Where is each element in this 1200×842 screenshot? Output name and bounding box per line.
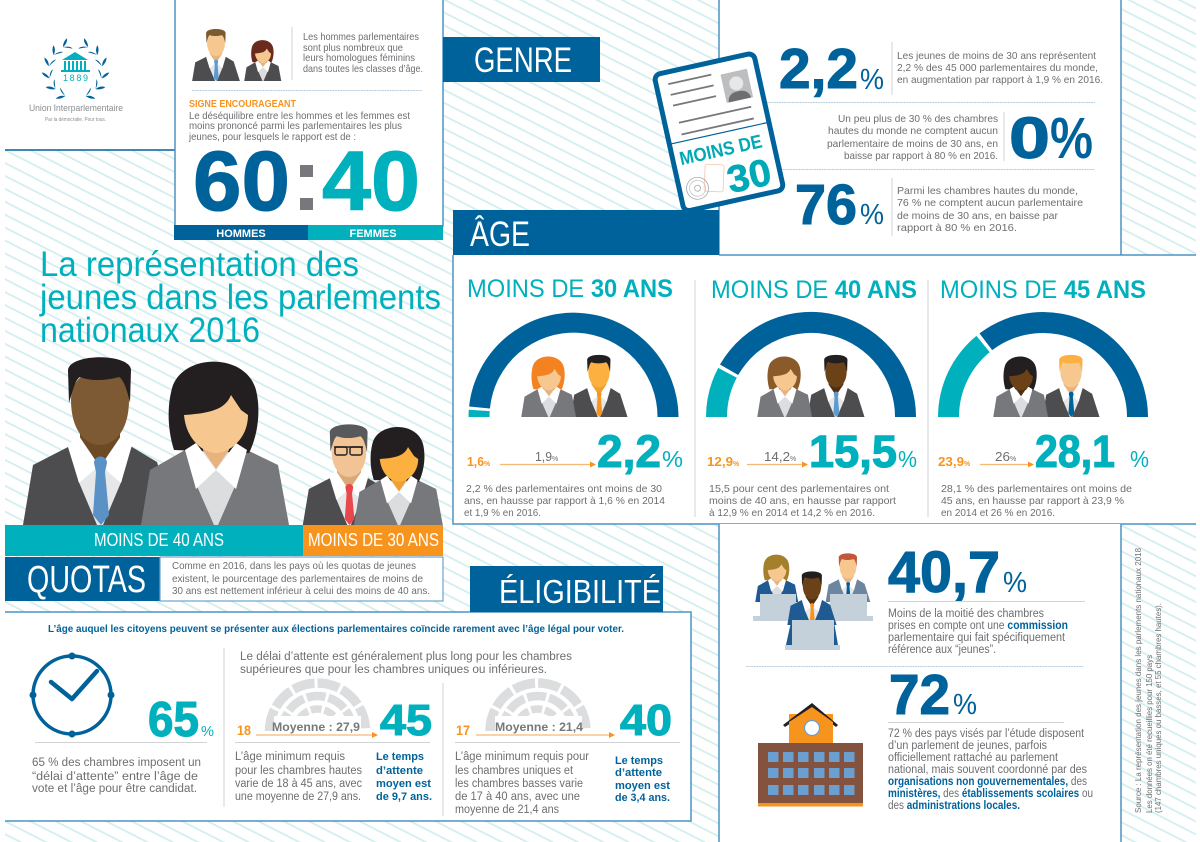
text: commission: référence aux “jeunes”.	[888, 644, 996, 656]
text: men outnumber women: sont plus nombreux que	[303, 42, 403, 54]
text	[941, 483, 1132, 519]
text: 2,2 %: Les jeunes de moins de 30 ans représentent	[897, 50, 1096, 62]
text: 65 %	[32, 757, 201, 795]
trend: 12,9 to 15,5: 15,5	[809, 426, 897, 477]
stat: 76 %: %	[860, 199, 884, 231]
text: et 1,9 % en 2016.	[464, 507, 541, 519]
column: moins de 30 ans	[464, 275, 683, 519]
text: 2,2 %: 2,2 % des 45 000 parlementaires du monde,	[897, 62, 1098, 74]
text: lower chambers	[455, 751, 589, 816]
label: average: Moyenne : 21,4	[495, 720, 583, 734]
icon: three people at laptops	[753, 553, 873, 650]
heading: MOINS DE 45 ANS	[940, 276, 1146, 304]
text: waiting period: Le délai d’attente est généralement plus long pour les chambres	[240, 651, 572, 663]
text: waiting period: supérieures que pour les chambres uniques ou inférieures.	[240, 664, 547, 676]
stat: 60:40: 60	[193, 134, 290, 228]
text: intro sentence: L’âge auquel les citoyens peuvent se présenter aux élections parlementaires coïncide rarement avec l’âge légal pour voter.	[48, 624, 624, 635]
text: youth parliaments: ministères, des établissements scolaires ou	[888, 788, 1093, 800]
trend: 12,9 to 15,5: %	[898, 446, 917, 472]
trend: 12,9 to 15,5	[707, 426, 917, 477]
text: 65 %: “délai d’attente” entre l’âge de	[32, 771, 198, 783]
text: waiting period	[240, 651, 572, 676]
callout: average wait 3,4: Le temps	[615, 755, 663, 767]
gauge: 2,2 %	[468, 313, 678, 417]
icon: glasses	[334, 447, 363, 455]
trend: 1,6 to 2,2	[467, 426, 683, 477]
trend: 12,9 to 15,5: 12,9	[707, 454, 733, 469]
text: ans, en hausse par rapport à 1,6 % en 2014	[464, 495, 665, 507]
icon: clock	[30, 652, 114, 738]
stat: range 17 to 40: 40	[620, 696, 672, 745]
panel: logo	[0, 0, 175, 150]
bar: hommes	[174, 225, 308, 240]
text: 76 %	[897, 185, 1083, 234]
text: men outnumber women: Les hommes parlementaires	[303, 31, 419, 43]
icon: two young parliamentarians	[993, 355, 1099, 417]
text: 2,2 %: en augmentation par rapport à 1,9 % en 2016.	[897, 74, 1103, 86]
stat: 60:40: 40	[322, 134, 420, 228]
heading: genre: GENRE	[474, 41, 572, 80]
icon: two young parliamentarians	[757, 355, 864, 417]
panel: gender ratio	[174, 0, 443, 240]
stat: 76 %: 76	[795, 173, 857, 237]
stat: 65 %: 65	[148, 693, 199, 747]
stat: 40,7 %: %	[1003, 567, 1027, 599]
panel: quotas text	[160, 557, 443, 601]
label: MOINS DE	[678, 131, 764, 170]
label: 30: 30	[723, 152, 775, 202]
text: 0 %	[827, 113, 998, 162]
panel: age top stats	[719, 0, 1121, 256]
label: average: Moyenne : 27,9	[272, 720, 360, 734]
trend: 23,9 to 28,1: %	[964, 461, 971, 468]
chart: upper chambers hemicycle	[270, 683, 366, 734]
illustration: under 40 group	[23, 357, 289, 525]
text: upper chambers: varie de 18 à 45 ans, avec	[235, 778, 362, 790]
trend: 23,9 to 28,1: 23,9	[938, 454, 964, 469]
source note: Source : La représentation des jeunes dans les parlements nationaux 2018	[1133, 548, 1143, 813]
panel: quotas text: 30 ans est nettement inférieur à celui des moins de 40 ans.	[172, 585, 430, 597]
text: 0 %: hautes du monde ne comptent aucun	[828, 125, 998, 137]
trend: 12,9 to 15,5: 14,2	[764, 449, 790, 464]
text: youth parliaments: des administrations locales.	[888, 800, 1020, 812]
text: lower chambers: de 17 à 40 ans, avec une	[455, 791, 580, 803]
text: 2,2 %	[897, 50, 1103, 86]
callout: average wait 9,7: d’attente	[376, 765, 423, 777]
stat: range 18 to 45: 45	[380, 696, 432, 745]
title: nationaux 2016	[40, 311, 260, 350]
text: upper chambers: pour les chambres hautes	[235, 765, 362, 777]
text: youth parliaments: 72 % des pays visés par l’étude disposent	[888, 728, 1085, 740]
icon: IPU laurel wreath emblem	[42, 38, 109, 102]
heading: MOINS DE 40 ANS	[711, 276, 917, 304]
organisation name: Union Interparlementaire	[29, 103, 123, 114]
trend: 23,9 to 28,1: %	[1130, 446, 1149, 472]
trend: 1,6 to 2,2: 2,2	[597, 426, 661, 477]
text: upper chambers	[235, 751, 362, 803]
stat: range 17 to 40	[456, 696, 672, 745]
text: 76 %: de moins de 30 ans, en baisse par	[897, 210, 1058, 222]
bar: femmes	[308, 225, 443, 240]
callout: average wait 9,7	[376, 751, 432, 803]
callout: average wait 3,4: d’attente	[615, 767, 662, 779]
title	[39, 245, 441, 350]
text: lower chambers: les chambres basses varie	[455, 778, 583, 790]
text: upper chambers: L’âge minimum requis	[235, 751, 345, 763]
text: imbalance: moins prononcé parmi les parlementaires les plus	[189, 120, 402, 132]
trend: 23,9 to 28,1: 26	[995, 449, 1010, 464]
text: à 12,9 % en 2014 et 14,2 % en 2016.	[709, 507, 875, 519]
gauge: 15,5 %	[706, 312, 916, 417]
stat: 60:40	[193, 134, 420, 228]
text: 65 %: 65 % des chambres imposent un	[32, 757, 201, 769]
text: moins de 40 ans, en hausse par rapport	[709, 495, 896, 507]
stat: 65 %: %	[201, 723, 214, 740]
callout: average wait 3,4: de 3,4 ans.	[615, 792, 670, 804]
slogan: Par la démocratie. Pour tous.	[45, 117, 106, 123]
text: commission: prises en compte ont une commission	[888, 620, 1068, 632]
text: men outnumber women	[303, 31, 423, 75]
panel: eligibility	[5, 612, 691, 821]
icon: IPU laurel wreath emblem: 1889	[63, 73, 88, 83]
text: youth parliaments: organisations non gouvernementales, des	[888, 776, 1087, 788]
band: moins de 40 ans	[5, 525, 303, 556]
trend: 12,9 to 15,5: %	[733, 461, 740, 468]
callout: average wait 9,7: moyen est	[376, 778, 431, 790]
source note	[1133, 548, 1163, 813]
text: imbalance	[188, 110, 410, 143]
callout: average wait 3,4	[615, 755, 670, 804]
trend: 23,9 to 28,1	[938, 426, 1149, 477]
text: lower chambers: L’âge minimum requis pour	[455, 751, 589, 763]
heading: MOINS DE 30 ANS	[467, 275, 673, 303]
bar: hommes: HOMMES	[216, 228, 266, 240]
callout: average wait 3,4: moyen est	[615, 780, 670, 792]
text: 76 %: 76 % ne comptent aucun parlementaire	[897, 197, 1083, 209]
stat: 72 %: 72	[889, 663, 950, 727]
text	[464, 483, 665, 519]
text: 0 %: baisse par rapport à 80 % en 2016.	[844, 150, 998, 162]
stat: range 18 to 45	[237, 696, 432, 745]
trend: 1,6 to 2,2: 1,6	[467, 454, 484, 469]
chart: lower chambers hemicycle	[490, 683, 586, 734]
text	[709, 483, 896, 519]
trend: 23,9 to 28,1: 28,1	[1035, 426, 1115, 477]
band: moins de 30 ans	[303, 525, 443, 556]
panel: age gauges	[453, 255, 1196, 524]
text: youth parliaments: d’un parlement de jeunes, parfois	[888, 740, 1047, 752]
callout: average wait 9,7: de 9,7 ans.	[376, 791, 432, 803]
text: men outnumber women: leurs homologues féminins	[303, 52, 415, 64]
text: 15,5 pour cent des parlementaires ont	[709, 483, 889, 495]
column: moins de 40 ans	[706, 276, 917, 519]
text: commission: parlementaire qui fait spécifiquement	[888, 632, 1066, 644]
stat: 2,2 %: %	[860, 64, 884, 96]
text: youth parliaments	[888, 728, 1093, 812]
text: en 2014 et 26 % en 2016.	[941, 507, 1055, 519]
text: men outnumber women: dans toutes les classes d’âge.	[303, 63, 423, 75]
panel: quotas text: Comme en 2016, dans les pays où les quotas de jeunes	[172, 560, 416, 572]
icon: two young parliamentarians	[521, 355, 627, 417]
text: 28,1 % des parlementaires ont moins de	[941, 483, 1132, 495]
heading: age	[453, 210, 719, 255]
heading: age: ÂGE	[470, 215, 530, 254]
icon: man and woman	[192, 29, 281, 81]
stat: 0 %	[1009, 106, 1093, 171]
text: 45 ans, en hausse par rapport à 23,9 %	[941, 495, 1124, 507]
stat: range 17 to 40: 17	[456, 722, 470, 738]
text: commission	[888, 608, 1068, 656]
stat: 0 %: %	[1050, 106, 1093, 171]
heading: eligibilite	[470, 566, 663, 612]
stat: range 18 to 45: 18	[237, 722, 251, 738]
heading: genre	[443, 37, 600, 82]
text: commission: Moins de la moitié des chambres	[888, 608, 1044, 620]
text: upper chambers: une moyenne de 27,9 ans.	[235, 791, 361, 803]
band: moins de 30 ans: MOINS DE 30 ANS	[308, 530, 439, 550]
trend: 1,6 to 2,2: %	[484, 461, 491, 468]
title: jeunes dans les parlements	[39, 278, 441, 317]
icon: candidate document, moins de 30	[654, 53, 784, 213]
source note: Les données on été recueillies pour 150 pays	[1144, 655, 1154, 813]
text: 76 %: rapport à 80 % en 2016.	[897, 222, 1017, 234]
illustration: under 30 group	[303, 424, 443, 525]
panel: quotas text: existent, le pourcentage des parlementaires de moins de	[172, 573, 423, 585]
text: imbalance: jeunes, pour lesquels le rapport est de :	[188, 131, 356, 143]
trend: 1,6 to 2,2: %	[662, 446, 683, 472]
text: 0 %: Un peu plus de 30 % des chambres	[838, 113, 998, 125]
panel: youth bodies	[719, 524, 1121, 842]
heading: signe encourageant: SIGNE ENCOURAGEANT	[189, 98, 296, 110]
trend: 1,6 to 2,2: %	[552, 456, 558, 463]
trend: 1,6 to 2,2: 1,9	[535, 449, 552, 464]
stat: 0 %: 0	[1009, 106, 1050, 171]
heading: quotas: QUOTAS	[27, 559, 146, 601]
stat: 2,2 %: 2,2	[779, 37, 858, 101]
text: 65 %: vote et l’âge pour être candidat.	[32, 783, 197, 795]
gauge: 28,1 %	[938, 312, 1148, 417]
trend: 23,9 to 28,1: %	[1010, 456, 1016, 463]
heading: eligibilite: ÉLIGIBILITÉ	[499, 573, 661, 610]
title: La représentation des	[40, 245, 359, 284]
text: 2,2 % des parlementaires ont moins de 30	[466, 483, 662, 495]
band: moins de 40 ans: MOINS DE 40 ANS	[94, 530, 224, 550]
stat: 40,7 %: 40,7	[888, 540, 1000, 605]
source note: (147 chambres uniques ou basses, et 55 chambres hautes).	[1153, 603, 1163, 813]
bar: femmes: FEMMES	[349, 228, 397, 240]
text: lower chambers: moyenne de 21,4 ans	[455, 804, 559, 816]
text: 0 %: parlementaire de moins de 30 ans, en	[827, 138, 998, 150]
icon: school building	[758, 703, 863, 806]
trend: 12,9 to 15,5: %	[790, 456, 796, 463]
text: youth parliaments: national, mais souvent coordonné par des	[888, 764, 1087, 776]
text: youth parliaments: officiellement rattaché au parlement	[888, 752, 1059, 764]
stat: 72 %: %	[953, 689, 977, 721]
callout: average wait 9,7: Le temps	[376, 751, 424, 763]
icon: disc and paper	[682, 160, 730, 201]
text: imbalance: Le déséquilibre entre les hommes et les femmes est	[189, 110, 410, 122]
text: 76 %: Parmi les chambres hautes du monde,	[897, 185, 1078, 197]
column: moins de 45 ans	[938, 276, 1149, 519]
text: lower chambers: les chambres uniques et	[455, 765, 574, 777]
